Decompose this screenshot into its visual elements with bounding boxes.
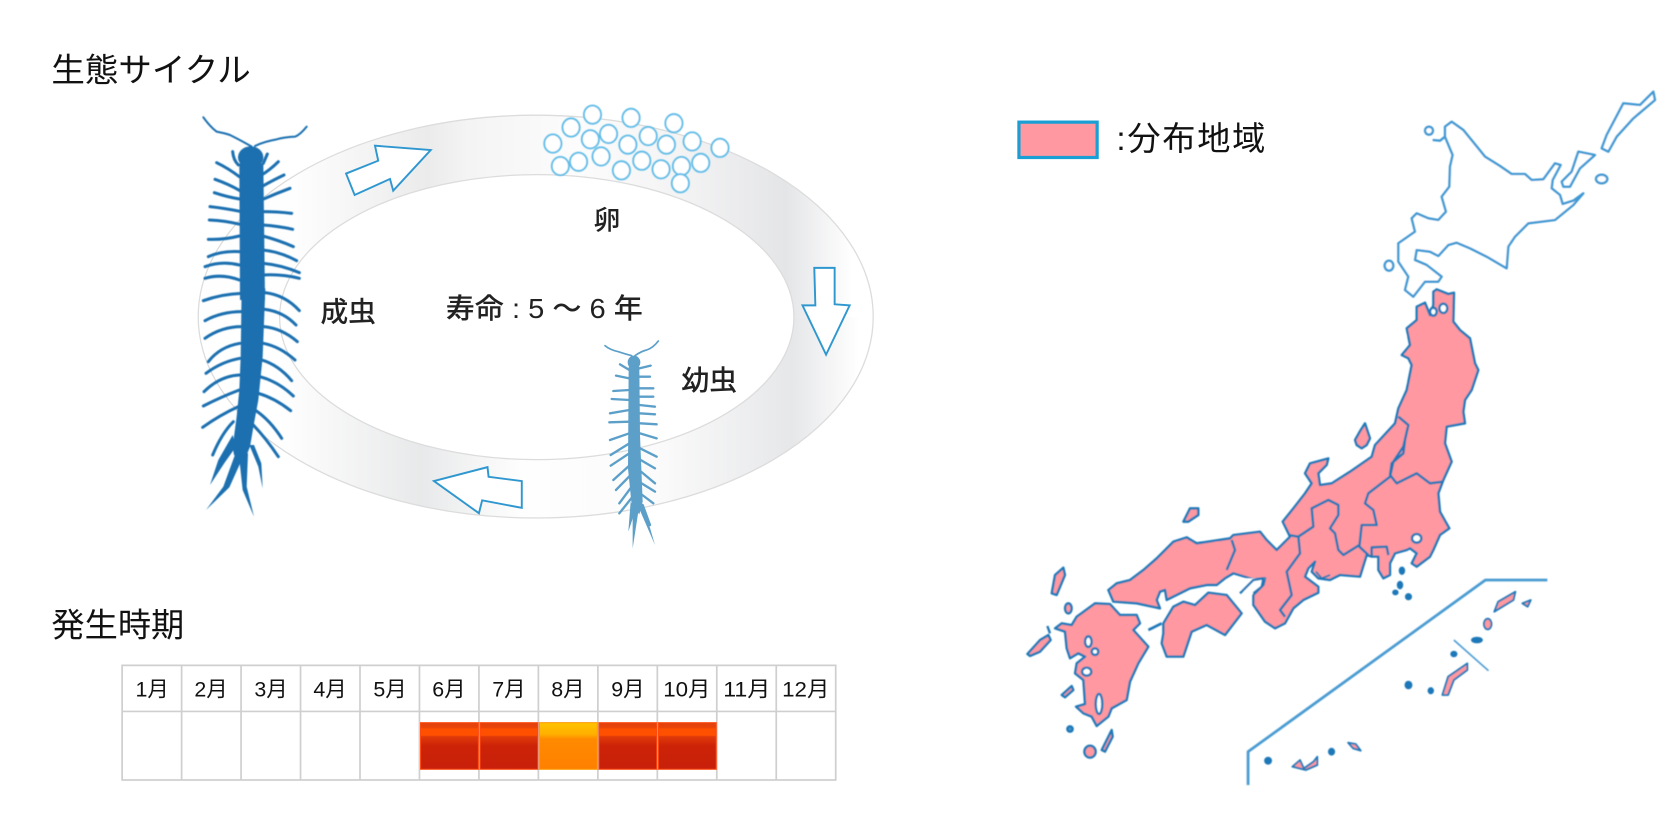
arrow: larva to adult	[434, 467, 522, 513]
dark islets	[1265, 567, 1482, 764]
map: Japan distribution	[1027, 92, 1655, 785]
month labels: 2月	[194, 677, 228, 701]
month labels: 11月	[723, 677, 770, 701]
legend: :分布地域	[1116, 121, 1265, 158]
Hokkaido and northern islands	[1385, 92, 1655, 297]
label: adult: 成虫	[320, 296, 376, 327]
chart: occurrence calendar	[122, 665, 836, 780]
heading: occurrence period: 発生時期	[51, 607, 184, 644]
Tokyo Bay head	[1412, 534, 1421, 543]
arrow: egg to larva	[802, 268, 850, 355]
prefecture boundaries	[1227, 417, 1443, 617]
Mutsu Bay	[1430, 304, 1447, 316]
Kyushu	[1055, 603, 1148, 726]
month labels: 12月	[782, 677, 829, 701]
illustration: adult centipede	[203, 117, 307, 517]
month labels: 1月	[135, 677, 169, 701]
Sado	[1355, 423, 1370, 448]
label: egg: 卵	[594, 205, 620, 235]
Honshu, Shikoku, Kyushu	[1108, 289, 1478, 628]
month labels	[135, 677, 829, 701]
month labels: 5月	[373, 677, 407, 701]
occurrence bars	[421, 723, 716, 769]
legend	[1019, 121, 1265, 158]
western islands	[1027, 635, 1051, 656]
month labels: 9月	[611, 677, 645, 701]
month labels: 4月	[313, 677, 347, 701]
month labels: 10月	[663, 677, 710, 701]
Osaka Bay	[1227, 578, 1265, 595]
label: lifespan: 寿命 : 5 ～ 6 年	[446, 293, 643, 324]
Ise Bay marks	[1316, 572, 1330, 578]
month labels: 6月	[432, 677, 466, 701]
label: larva: 幼虫	[681, 365, 737, 396]
inset frame	[1248, 580, 1547, 785]
eggs	[544, 106, 729, 192]
Okinawa inset and southern islands	[1248, 567, 1547, 785]
illustration: larva centipede	[605, 341, 658, 548]
cycle ring	[198, 115, 873, 518]
Honshu	[1108, 289, 1478, 628]
arrow: adult to egg	[346, 146, 431, 195]
month labels: 8月	[551, 677, 585, 701]
month labels: 7月	[492, 677, 526, 701]
Shikoku	[1162, 593, 1242, 657]
heading: life cycle: 生態サイクル	[51, 52, 251, 89]
month labels: 3月	[254, 677, 288, 701]
panel: life cycle diagram	[198, 106, 873, 548]
